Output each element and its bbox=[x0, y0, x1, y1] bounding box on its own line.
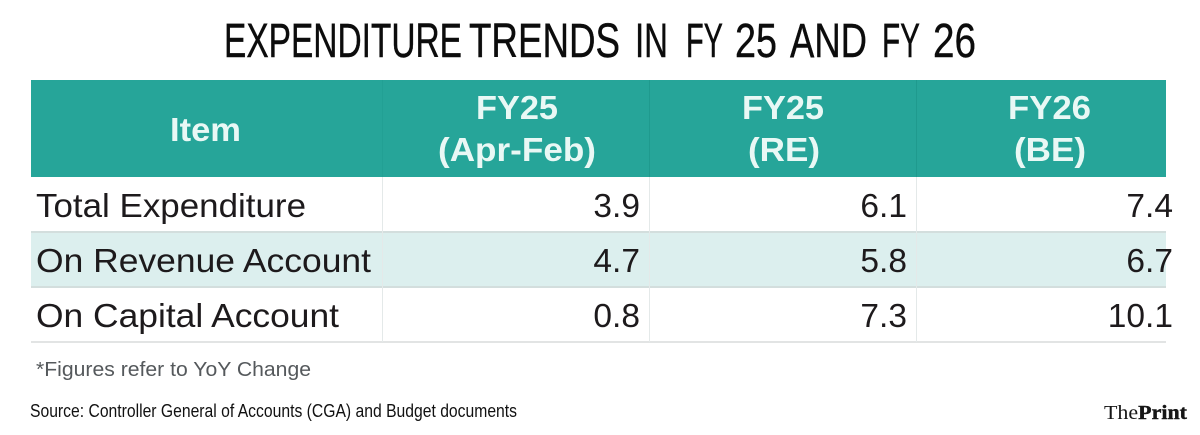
row: On Capital Account: 0.8 bbox=[593, 298, 640, 335]
title: EXPENDITURE bbox=[224, 15, 462, 68]
header: FY25 Apr-Feb: FY25 bbox=[476, 89, 558, 126]
header: FY25 RE bbox=[742, 89, 824, 168]
title: FY bbox=[882, 15, 920, 68]
title: IN bbox=[635, 15, 668, 68]
header: FY26 BE bbox=[1008, 89, 1091, 168]
row: Total Expenditure: Total Expenditure bbox=[36, 188, 306, 225]
header: FY25 Apr-Feb bbox=[438, 89, 596, 168]
row: On Revenue Account: On Revenue Account bbox=[36, 243, 372, 280]
table header row bbox=[31, 80, 1166, 177]
row: Total Expenditure: 7.4 bbox=[1126, 188, 1173, 225]
row: Total Expenditure bbox=[31, 177, 1173, 232]
header: FY25 RE: (RE) bbox=[748, 131, 820, 168]
table bbox=[31, 80, 1173, 343]
title: FY bbox=[686, 15, 723, 68]
row: On Revenue Account bbox=[31, 232, 1173, 287]
title: 26 bbox=[933, 15, 976, 68]
row: On Revenue Account: 5.8 bbox=[860, 243, 907, 280]
row: On Capital Account: 7.3 bbox=[860, 298, 907, 335]
row: On Capital Account bbox=[31, 287, 1173, 342]
row: On Capital Account: 10.1 bbox=[1108, 298, 1173, 335]
source line: Source: Controller General of Accounts (CGA) and Budget documents bbox=[30, 401, 517, 421]
header: FY25 RE: FY25 bbox=[742, 89, 824, 126]
title: AND bbox=[790, 15, 867, 68]
title bbox=[224, 15, 976, 68]
header: Item: Item bbox=[170, 111, 241, 148]
title: 25 bbox=[735, 15, 777, 68]
header: FY26 BE: FY26 bbox=[1008, 89, 1091, 126]
row: Total Expenditure: 6.1 bbox=[860, 188, 907, 225]
row: On Revenue Account: 6.7 bbox=[1126, 243, 1173, 280]
title: TRENDS bbox=[469, 15, 620, 68]
row: Total Expenditure: 3.9 bbox=[593, 188, 640, 225]
row: On Capital Account: On Capital Account bbox=[36, 298, 340, 335]
footnote: *Figures refer to YoY Change bbox=[36, 358, 311, 381]
header: FY26 BE: (BE) bbox=[1014, 131, 1086, 168]
logo: ThePrint: ThePrint bbox=[1104, 402, 1187, 424]
header: FY25 Apr-Feb: (Apr-Feb) bbox=[438, 131, 596, 168]
row: On Revenue Account: 4.7 bbox=[593, 243, 640, 280]
